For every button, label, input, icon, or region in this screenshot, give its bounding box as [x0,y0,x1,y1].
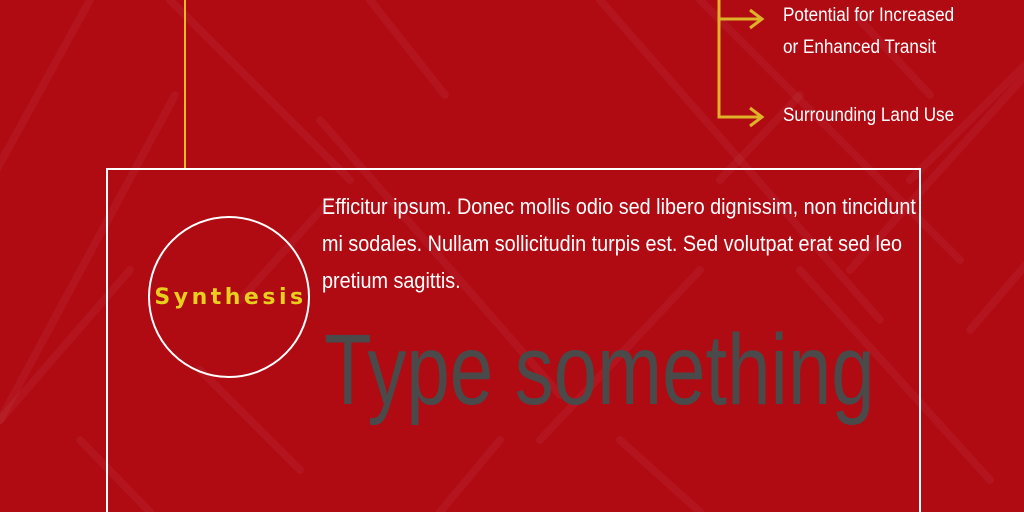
bracket arrows [718,0,764,128]
text block: pretium sagittis. [322,268,461,293]
placeholder text: Type something [324,314,875,426]
label: potential transit [783,5,954,58]
heading: synthesis: Synthesis [154,284,307,310]
text block: Efficitur ipsum. Donec mollis odio sed libero dignissim, non tincidunt [322,194,916,219]
label: potential transit: Potential for Increased [783,5,954,26]
connector line: left [184,0,186,170]
label: surrounding land use: Surrounding Land Use [783,105,954,126]
text block [322,194,916,293]
label: potential transit: or Enhanced Transit [783,37,936,58]
icon: synthesis circle [148,216,310,378]
panel: synthesis box [106,168,921,512]
text block: mi sodales. Nullam sollicitudin turpis est. Sed volutpat erat sed leo [322,231,902,256]
